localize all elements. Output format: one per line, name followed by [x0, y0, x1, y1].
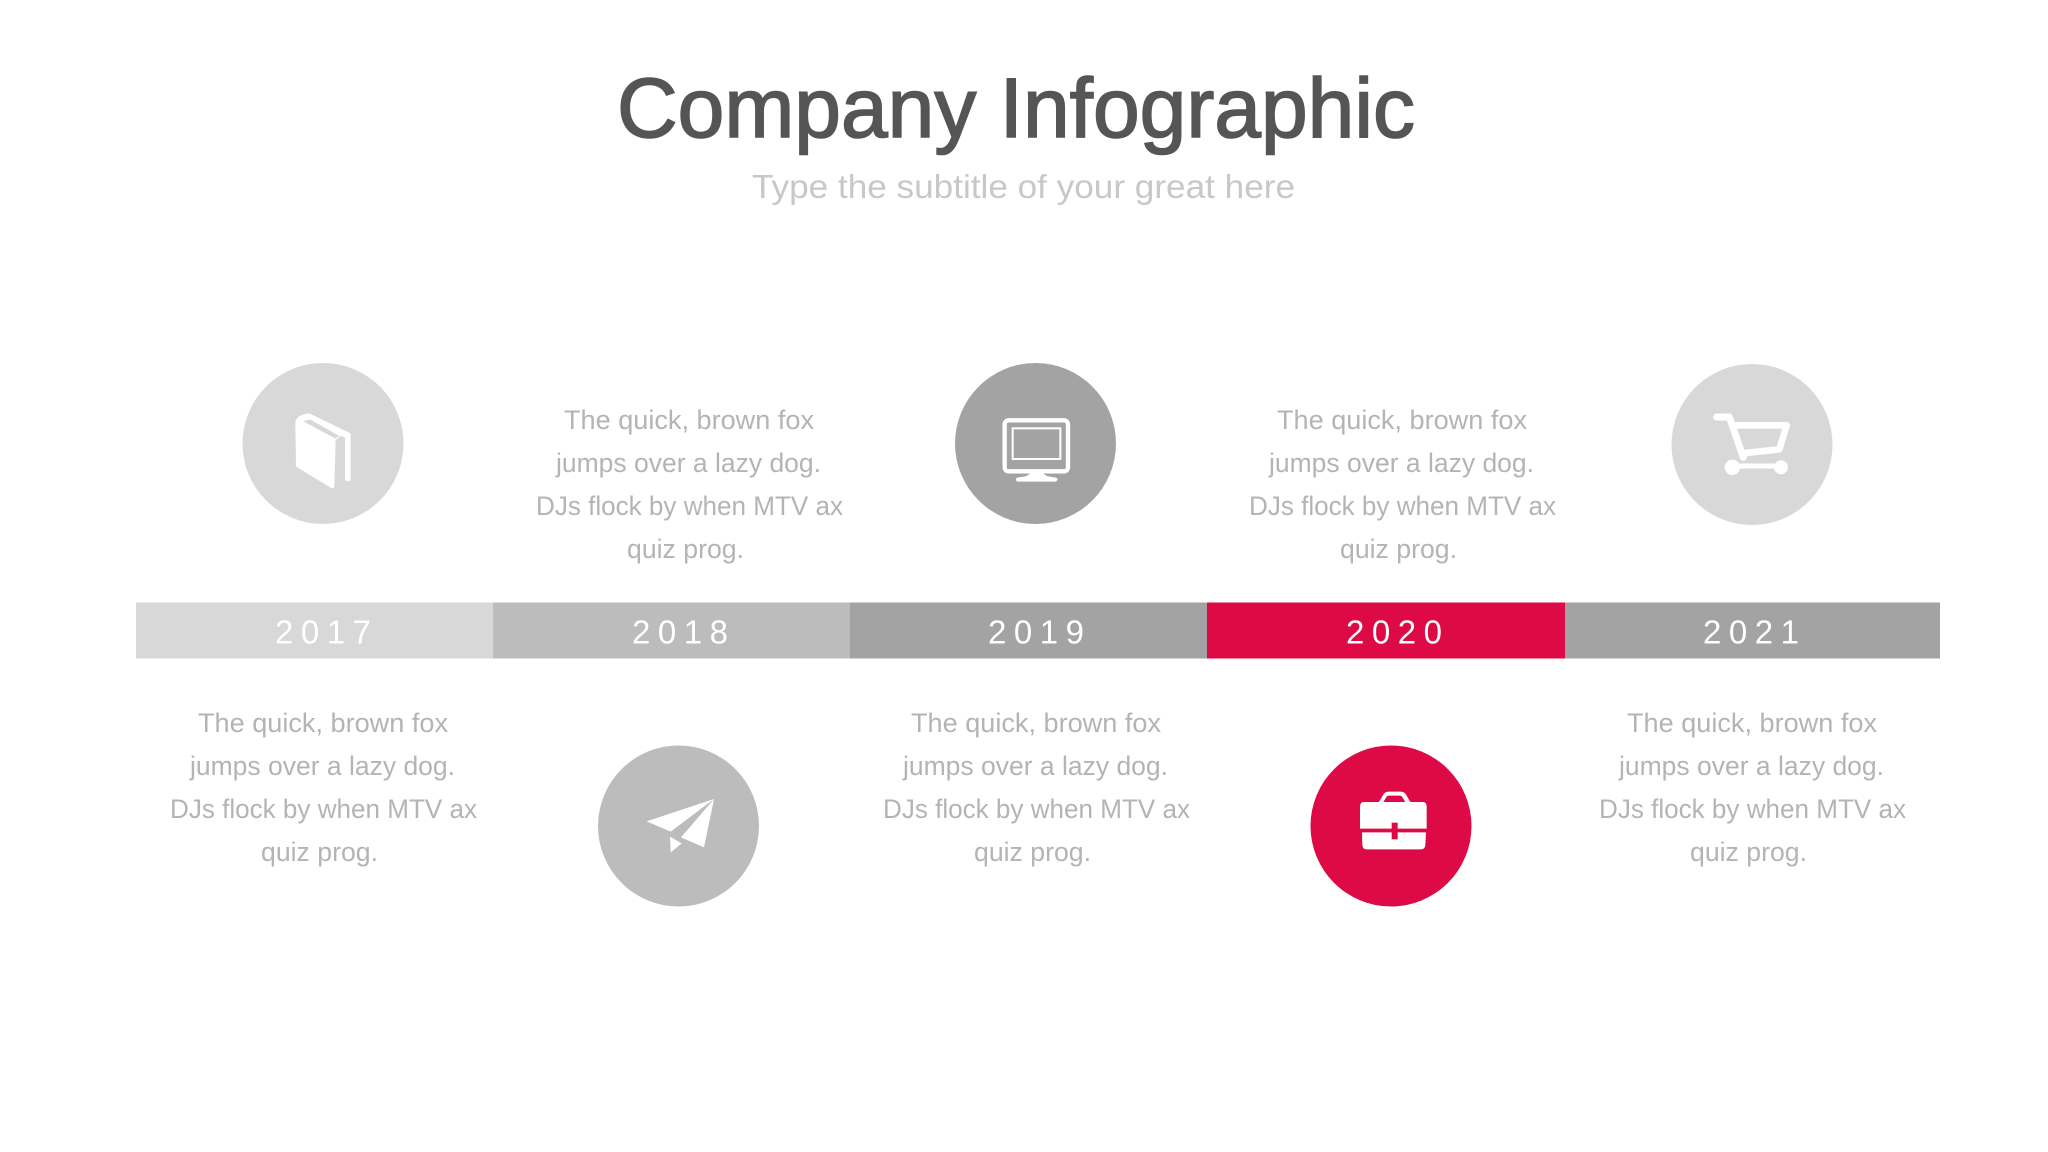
segment 2021: 2021	[1703, 614, 1799, 650]
text block: 2020: The quick, brown fox	[1277, 405, 1527, 435]
timeline bar	[136, 602, 1940, 658]
text block: 2018: DJs flock by when MTV ax	[536, 491, 843, 521]
text block: 2021: The quick, brown fox	[1627, 708, 1877, 738]
title: Company Infographic	[617, 61, 1415, 155]
text block: 2017: jumps over a lazy dog.	[189, 751, 455, 781]
text block: 2020	[1249, 405, 1556, 564]
text block: 2018: The quick, brown fox	[564, 405, 814, 435]
segment 2021	[1565, 602, 1940, 658]
text block: 2020: quiz prog.	[1340, 534, 1457, 564]
text block: 2021: quiz prog.	[1690, 837, 1807, 867]
text block: 2019: quiz prog.	[974, 837, 1091, 867]
text block: 2020: jumps over a lazy dog.	[1268, 448, 1534, 478]
icon: paper plane	[598, 746, 759, 906]
text block: 2019	[883, 708, 1190, 867]
text block: 2017	[170, 708, 477, 867]
segment 2019: 2019	[988, 614, 1084, 650]
segment 2020: 2020	[1346, 614, 1442, 650]
segment 2017	[136, 602, 493, 658]
text block: 2021	[1599, 708, 1906, 867]
segment 2018: 2018	[632, 614, 728, 650]
text block: 2017: quiz prog.	[261, 837, 378, 867]
text block: 2018: quiz prog.	[627, 534, 744, 564]
segment 2017: 2017	[275, 614, 371, 650]
icon: shopping cart	[1672, 364, 1832, 525]
text block: 2020: DJs flock by when MTV ax	[1249, 491, 1556, 521]
text block: 2019: jumps over a lazy dog.	[902, 751, 1168, 781]
text block: 2018	[536, 405, 843, 564]
subtitle: Type the subtitle of your great here	[752, 168, 1295, 205]
text block: 2017: The quick, brown fox	[198, 708, 448, 738]
text block: 2021: DJs flock by when MTV ax	[1599, 794, 1906, 824]
text block: 2018: jumps over a lazy dog.	[555, 448, 821, 478]
text block: 2019: The quick, brown fox	[911, 708, 1161, 738]
icon: book	[242, 363, 404, 524]
segment 2018	[493, 602, 850, 658]
icon: briefcase	[1310, 746, 1472, 906]
segment 2020	[1207, 602, 1565, 658]
segment 2019	[850, 602, 1207, 658]
text block: 2021: jumps over a lazy dog.	[1618, 751, 1884, 781]
icon: monitor	[955, 363, 1116, 524]
text block: 2019: DJs flock by when MTV ax	[883, 794, 1190, 824]
text block: 2017: DJs flock by when MTV ax	[170, 794, 477, 824]
